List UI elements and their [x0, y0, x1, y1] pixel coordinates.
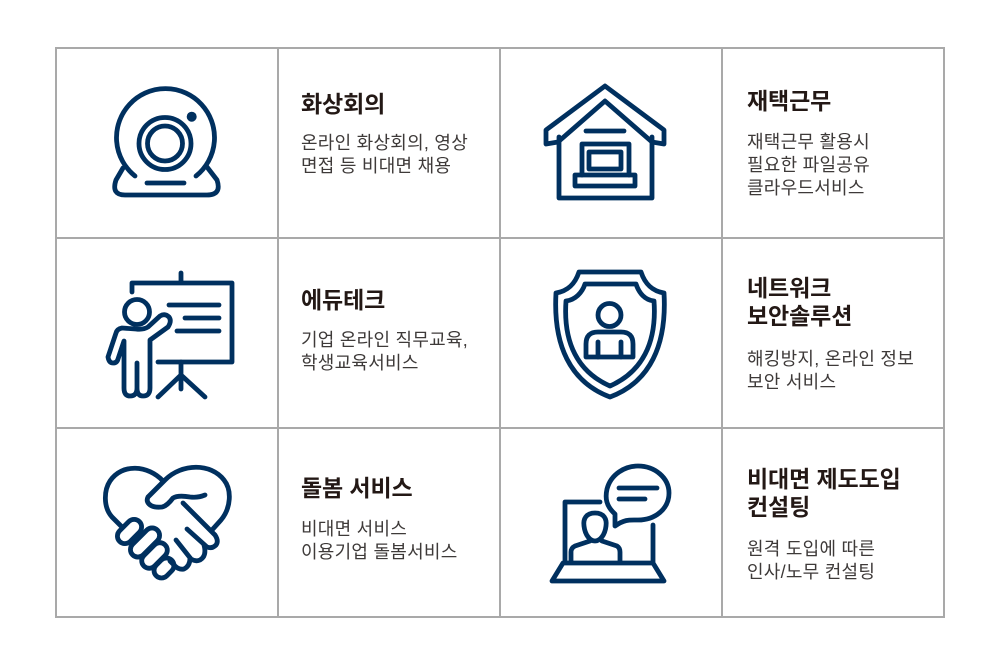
heading: 네트워크 보안솔루션: 보안솔루션 [747, 303, 852, 329]
text: 돌봄 서비스 설명: 이용기업 돌봄서비스 [301, 542, 458, 562]
text: 화상회의 설명 [301, 133, 468, 176]
text: 화상회의 설명: 온라인 화상회의, 영상 [301, 133, 468, 153]
heading: 에듀테크: 에듀테크 [301, 287, 385, 313]
heading: 화상회의: 화상회의 [301, 91, 385, 117]
heading: 비대면 제도도입 컨설팅 [747, 466, 901, 520]
text: 에듀테크 설명: 기업 온라인 직무교육, [301, 330, 468, 350]
text: 에듀테크 설명: 학생교육서비스 [301, 353, 419, 373]
text: 재택근무 설명: 클라우드서비스 [747, 178, 865, 198]
text: 재택근무 설명: 필요한 파일공유 [747, 155, 870, 175]
heading: 비대면 제도도입 컨설팅: 비대면 제도도입 [747, 466, 901, 492]
text: 네트워크 설명: 보안 서비스 [747, 372, 836, 392]
text: 비대면 제도도입 설명: 인사/노무 컨설팅 [747, 562, 875, 582]
heading: 네트워크 보안솔루션: 네트워크 [747, 275, 831, 301]
text: 돌봄 서비스 설명: 비대면 서비스 [301, 519, 407, 539]
text: 화상회의 설명: 면접 등 비대면 채용 [301, 156, 451, 176]
text: 재택근무 설명: 재택근무 활용시 [747, 132, 870, 152]
text: 에듀테크 설명 [301, 330, 468, 373]
heading: 재택근무: 재택근무 [747, 88, 831, 114]
text: 네트워크 설명: 해킹방지, 온라인 정보 [747, 349, 914, 369]
heading: 돌봄 서비스: 돌봄 서비스 [301, 475, 413, 501]
heading: 네트워크 보안솔루션 [747, 275, 852, 329]
text: 비대면 제도도입 설명: 원격 도입에 따른 [747, 539, 875, 559]
text: 비대면 제도도입 설명 [747, 539, 875, 582]
text: 돌봄 서비스 설명 [301, 519, 458, 562]
text: 재택근무 설명 [747, 132, 870, 198]
text: 네트워크 설명 [747, 349, 914, 392]
heading: 비대면 제도도입 컨설팅: 컨설팅 [747, 494, 810, 520]
